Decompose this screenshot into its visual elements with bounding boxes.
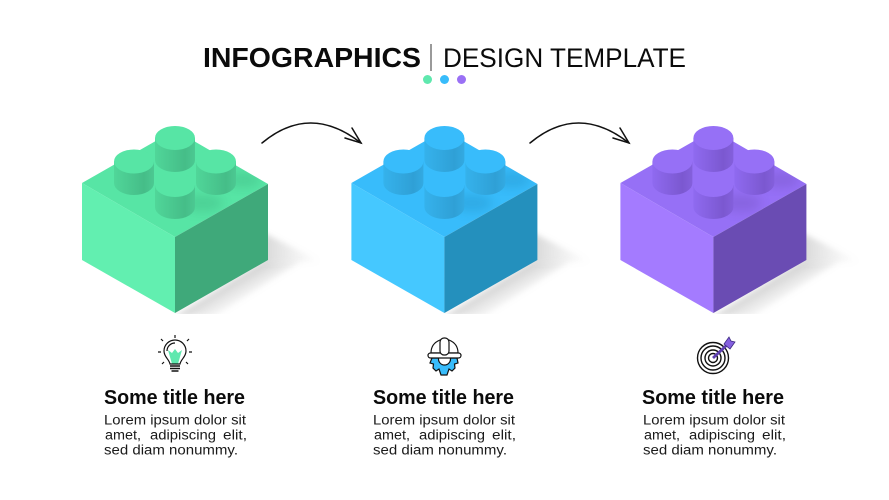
arrow: green to blue [262, 123, 361, 143]
heading: step 1: Some title here [104, 387, 245, 409]
icon: light bulb [158, 335, 192, 371]
brick: blue [351, 126, 591, 316]
heading: step 3: Some title here [642, 387, 784, 409]
text: step 2: Lorem ipsum dolor sit [373, 412, 515, 428]
text: step 1 [104, 412, 247, 458]
text: step 2: elit, [492, 428, 516, 442]
icon: target and dart [698, 337, 735, 374]
text: step 2: amet, [374, 428, 410, 442]
brick: green [82, 126, 322, 316]
icon: helmet and gear [428, 338, 461, 375]
text: step 1: Lorem ipsum dolor sit [104, 412, 246, 428]
title: DESIGN TEMPLATE [443, 43, 686, 73]
text: step 3: adipiscing [689, 428, 755, 442]
heading: step 2: Some title here [373, 387, 514, 409]
text: step 1: amet, [105, 428, 141, 442]
text: step 3: amet, [644, 428, 680, 442]
text: step 1: adipiscing [150, 428, 216, 442]
text: step 2: sed diam nonummy. [373, 442, 507, 458]
brick: purple [620, 126, 860, 316]
text: step 1: elit, [223, 428, 247, 442]
text: step 2: adipiscing [419, 428, 485, 442]
title colour dots [423, 75, 466, 84]
title: INFOGRAPHICS [203, 42, 421, 73]
text: step 1: sed diam nonummy. [104, 442, 238, 458]
text: step 3: sed diam nonummy. [643, 442, 777, 458]
text: step 3: elit, [762, 428, 786, 442]
text: step 3 [643, 412, 786, 458]
text: step 3: Lorem ipsum dolor sit [643, 412, 785, 428]
title [203, 42, 686, 73]
text: step 2 [373, 412, 516, 458]
arrow: blue to purple [530, 123, 629, 143]
